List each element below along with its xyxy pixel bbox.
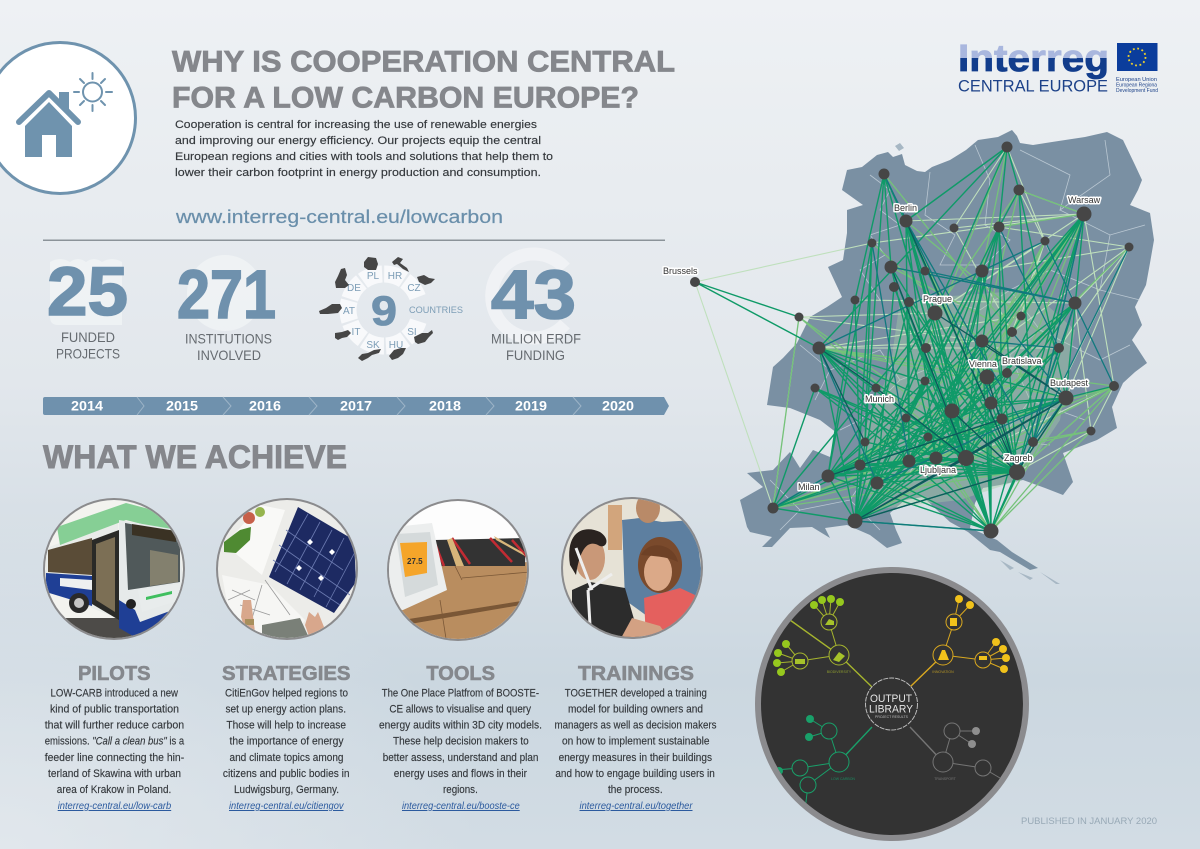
panel: trainings: interreg-central.eu/together xyxy=(580,801,693,812)
output library mind map: LOW CARBON xyxy=(831,777,855,781)
panel: strategies: and climate topics among xyxy=(230,752,344,764)
city labels: Budapest xyxy=(1050,378,1089,388)
panel: trainings: on how to implement sustainable xyxy=(562,736,710,748)
logo: Interreg Central Europe: European Regiona xyxy=(1116,82,1157,88)
panel: tools: TOOLS xyxy=(426,663,495,685)
panel: tools: better assess, understand and plan xyxy=(383,752,538,764)
stat: million ERDF funding xyxy=(491,254,581,363)
country silhouettes xyxy=(319,257,435,361)
panel: pilots: kind of public transportation xyxy=(50,703,179,715)
panel: strategies: Ludwigsburg, Germany. xyxy=(234,784,339,796)
logo: Interreg Central Europe: Development Fund xyxy=(1116,88,1158,94)
photo: solar panel xyxy=(216,498,358,640)
stat: institutions involved xyxy=(177,255,276,363)
stat: funded projects xyxy=(47,253,128,362)
logo: Interreg Central Europe xyxy=(958,43,1158,93)
panel: tools: These help decision makers to xyxy=(393,736,529,748)
logo: Interreg Central Europe: Interreg xyxy=(958,38,1109,80)
panel: strategies: interreg-central.eu/citiengov xyxy=(229,801,344,812)
city labels: Munich xyxy=(865,394,894,404)
map silhouette xyxy=(740,130,1154,570)
output library mind map: INNOVATION xyxy=(932,670,954,674)
panel: trainings: TOGETHER developed a training xyxy=(565,687,707,699)
city labels: Zagreb xyxy=(1004,453,1033,463)
stat: institutions involved: INVOLVED xyxy=(197,347,261,363)
panel: pilots: interreg-central.eu/low-carb xyxy=(58,801,172,812)
panel: pilots xyxy=(45,663,185,812)
city labels: Milan xyxy=(798,482,820,492)
panel: strategies: CitiEnGov helped regions to xyxy=(225,687,348,699)
output library mind map xyxy=(758,570,1026,838)
panel: strategies: STRATEGIES xyxy=(222,663,350,685)
countries ring: DE xyxy=(347,283,361,294)
photo: thermostat and floor xyxy=(387,499,529,641)
photo: thermostat and floor: 27.5 xyxy=(407,557,423,566)
countries ring xyxy=(319,257,463,361)
panel: strategies xyxy=(222,663,350,812)
pale links xyxy=(695,147,1129,531)
photo: bus xyxy=(43,498,185,640)
panel: pilots: PILOTS xyxy=(78,663,150,685)
publication date: PUBLISHED IN JANUARY 2020 xyxy=(1021,816,1157,827)
stat: million ERDF funding: 43 xyxy=(491,256,576,333)
panel: tools xyxy=(379,663,542,812)
countries ring: CZ xyxy=(407,283,421,294)
central library node: OUTPUT xyxy=(870,693,912,705)
countries ring: HU xyxy=(389,340,403,351)
yellow branch xyxy=(910,595,1010,687)
photo: family with wind turbine model xyxy=(561,497,703,639)
stat: funded projects: PROJECTS xyxy=(56,346,120,362)
stat: institutions involved: 271 xyxy=(177,256,276,333)
panel: pilots: area of Krakow in Poland. xyxy=(57,784,171,796)
panel: strategies: the importance of energy xyxy=(230,736,344,748)
central library node: PROJECT RESULTS xyxy=(875,715,909,719)
logo: Interreg Central Europe: European Union xyxy=(1116,77,1157,83)
logo: Interreg Central Europe: CENTRAL EUROPE xyxy=(958,78,1108,96)
central library node: LIBRARY xyxy=(869,704,914,716)
title: WHY IS COOPERATION CENTRAL xyxy=(172,46,675,78)
stat: funded projects: FUNDED xyxy=(61,329,115,345)
timeline arrow 2014-2020: 2018 xyxy=(429,398,461,414)
intro text: Cooperation is central for increasing the use of renewable energies xyxy=(175,119,538,131)
intro text xyxy=(175,119,553,179)
header icon: house and sun xyxy=(0,42,136,194)
city labels: Berlin xyxy=(894,203,917,213)
timeline arrow 2014-2020: 2019 xyxy=(515,398,547,414)
title: FOR A LOW CARBON EUROPE? xyxy=(172,82,639,114)
panel: strategies: Those will help to increase xyxy=(226,720,346,732)
central library node xyxy=(866,678,918,730)
city labels: Vienna xyxy=(969,359,997,369)
city labels: Prague xyxy=(923,294,952,304)
light green links xyxy=(773,147,1129,531)
countries ring: SK xyxy=(366,340,380,351)
map: central europe cooperation network xyxy=(663,130,1154,584)
network nodes xyxy=(690,142,1134,538)
stat: million ERDF funding: MILLION ERDF xyxy=(491,330,581,346)
countries ring: HR xyxy=(388,271,402,282)
intro text: and improving our energy efficiency. Our projects equip the central xyxy=(175,135,541,147)
stat: million ERDF funding: FUNDING xyxy=(506,347,565,363)
timeline arrow 2014-2020 xyxy=(43,397,669,415)
output library mind map: BIODIVERSITY xyxy=(827,670,852,674)
panel: trainings: and how to engage building users in xyxy=(555,768,715,780)
panel: trainings: model for building owners and xyxy=(568,703,703,715)
website url: www.interreg-central.eu/lowcarbon xyxy=(175,207,503,227)
countries ring: COUNTRIES xyxy=(409,305,463,316)
panel: tools: The One Place Platfrom of BOOSTE- xyxy=(382,687,539,699)
panel: tools: energy audits within 3D city models. xyxy=(379,720,542,732)
city labels xyxy=(663,195,1101,492)
intro text: lower their carbon footprint in energy production and consumption. xyxy=(175,167,541,179)
panel: tools: regions. xyxy=(443,784,478,796)
panel: strategies: citizens and public bodies in xyxy=(223,768,350,780)
panel: trainings: TRAININGS xyxy=(578,663,694,685)
panel: pilots: emissions. "Call a clean bus" is a xyxy=(45,736,185,748)
city labels: Ljubljana xyxy=(920,465,956,475)
panel: pilots: feeder line connecting the hin- xyxy=(45,752,185,764)
timeline arrow 2014-2020: 2017 xyxy=(340,398,372,414)
dark links xyxy=(819,221,1066,521)
panel: tools: interreg-central.eu/booste-ce xyxy=(402,801,520,812)
stat: institutions involved: INSTITUTIONS xyxy=(185,330,272,346)
panel: pilots: LOW-CARB introduced a new xyxy=(50,687,178,699)
countries ring: PL xyxy=(367,271,380,282)
title xyxy=(172,46,675,114)
timeline arrow 2014-2020: 2020 xyxy=(602,398,634,414)
panel: tools: energy uses and flows in their xyxy=(394,768,527,780)
stat: funded projects: 25 xyxy=(47,253,128,330)
olive branch xyxy=(773,595,872,687)
panel: tools: CE allows to visualise and query xyxy=(389,703,531,715)
panel: trainings: energy measures in their buildings xyxy=(559,752,712,764)
main green links xyxy=(695,147,1114,531)
countries ring: IT xyxy=(352,327,360,338)
countries ring: AT xyxy=(343,306,355,317)
city labels: Bratislava xyxy=(1002,356,1042,366)
timeline arrow 2014-2020: 2016 xyxy=(249,398,281,414)
panel: trainings: the process. xyxy=(608,784,663,796)
regional borders xyxy=(770,140,1145,530)
output library mind map: TRANSPORT xyxy=(934,777,957,781)
countries ring: 9 xyxy=(371,287,397,334)
panel: strategies: set up energy action plans. xyxy=(226,703,346,715)
grey branch xyxy=(910,723,1000,778)
panel: pilots: that will further reduce carbon xyxy=(45,720,184,732)
panel: trainings: managers as well as decision makers xyxy=(554,720,717,732)
panel: pilots: terland of Skawina with urban xyxy=(48,768,181,780)
logo: Interreg Central Europe: Interreg xyxy=(958,38,1109,80)
timeline arrow 2014-2020: 2014 xyxy=(71,398,103,414)
pale green wash in dense centre xyxy=(860,290,1075,510)
green branch xyxy=(775,715,872,810)
panel: trainings xyxy=(554,663,717,812)
city labels: Warsaw xyxy=(1068,195,1101,205)
heading: what we achieve: WHAT WE ACHIEVE xyxy=(43,439,347,475)
city labels: Brussels xyxy=(663,266,698,276)
teal links xyxy=(773,174,1129,531)
timeline arrow 2014-2020: 2015 xyxy=(166,398,198,414)
countries ring: SI xyxy=(407,327,417,338)
intro text: European regions and cities with tools and solutions that help them to xyxy=(175,151,553,163)
